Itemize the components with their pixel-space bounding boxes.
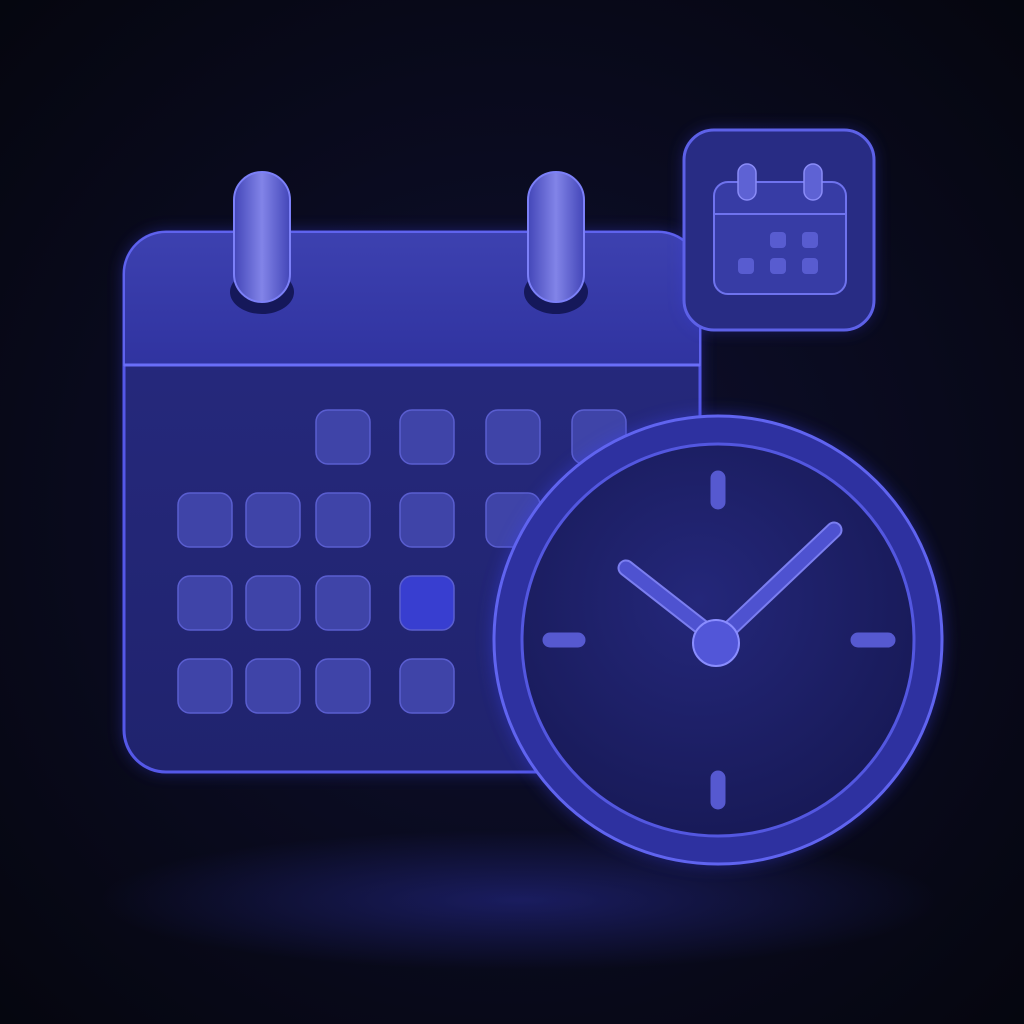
calendar header bbox=[124, 232, 700, 365]
clock ticks bbox=[550, 478, 888, 802]
date grid bbox=[178, 410, 626, 713]
clock hands bbox=[626, 530, 834, 640]
clock bbox=[492, 414, 944, 866]
calendar bbox=[124, 172, 700, 772]
binder rings bbox=[230, 172, 588, 314]
small calendar icon tile bbox=[684, 130, 874, 330]
